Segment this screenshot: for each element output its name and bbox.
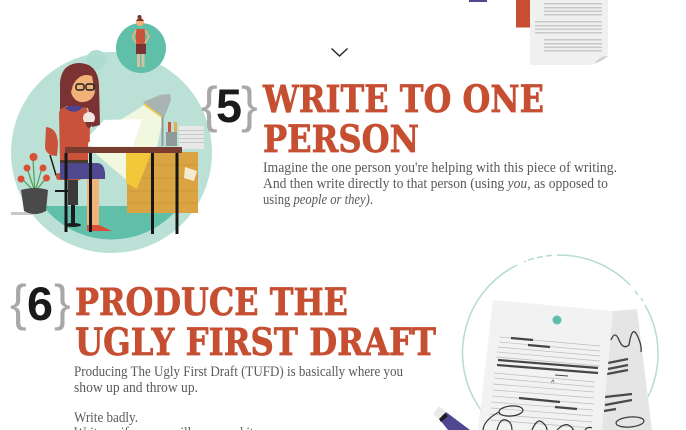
desk lamp <box>143 94 171 146</box>
back paper lines <box>604 332 644 428</box>
potted plant <box>11 153 50 215</box>
pen <box>433 406 470 430</box>
section 5 body text: using people or they). <box>263 192 373 208</box>
desk drawers <box>127 152 198 213</box>
illustration: previous section paper and bookmark <box>469 0 608 65</box>
section 6 number <box>10 275 71 331</box>
light cone <box>88 104 163 189</box>
background circle <box>11 52 212 253</box>
section 5 number: { <box>201 77 218 133</box>
chair <box>45 127 82 227</box>
woman figure <box>59 63 112 231</box>
section 6 heading <box>75 280 436 364</box>
pin <box>552 316 562 324</box>
dashed circle outline <box>463 255 658 414</box>
section 5 heading: WRITE TO ONE <box>262 77 544 121</box>
illustration: woman writing at desk <box>11 15 212 253</box>
bold text bars <box>497 338 598 409</box>
desk top and legs <box>64 147 182 234</box>
small bubble <box>86 50 106 70</box>
section 6 number: { <box>10 275 27 331</box>
section 6 body text <box>74 364 403 430</box>
section 5 body text: Imagine the one person you're helping with this piece of writing. <box>263 160 617 176</box>
front paper <box>478 300 613 430</box>
yellow paper <box>126 153 151 189</box>
icon: chevron down arrow <box>332 48 348 56</box>
laptop <box>80 119 142 146</box>
section 6 body text: Producing The Ugly First Draft (TUFD) is basically where you <box>74 364 403 380</box>
section 6 heading: UGLY FIRST DRAFT <box>75 320 436 364</box>
section 5 heading: PERSON <box>263 117 419 161</box>
section 5 heading <box>262 77 544 161</box>
section 5 number: } <box>241 77 258 133</box>
paper stack <box>179 126 204 149</box>
section 6 number: } <box>54 275 71 331</box>
section 5 number: 5 <box>216 79 242 132</box>
section 6 number: 6 <box>27 277 53 330</box>
section 5 number <box>201 77 258 133</box>
ruled lines <box>490 337 600 428</box>
section 5 body text: And then write directly to that person (using you, as opposed to <box>263 176 608 192</box>
section 6 body text: show up and throw up. <box>74 380 198 396</box>
illustration: draft papers with scribbles <box>433 255 658 430</box>
section 6 body text: Write badly. <box>74 410 138 426</box>
scribbles <box>483 405 592 430</box>
pencil cup <box>166 122 177 146</box>
back paper <box>598 309 652 430</box>
floor <box>46 206 174 240</box>
insert mark: ^ <box>551 380 555 386</box>
reader avatar bubble <box>116 15 166 73</box>
section 6 heading: PRODUCE THE <box>75 280 348 324</box>
section 5 body text <box>263 160 617 208</box>
